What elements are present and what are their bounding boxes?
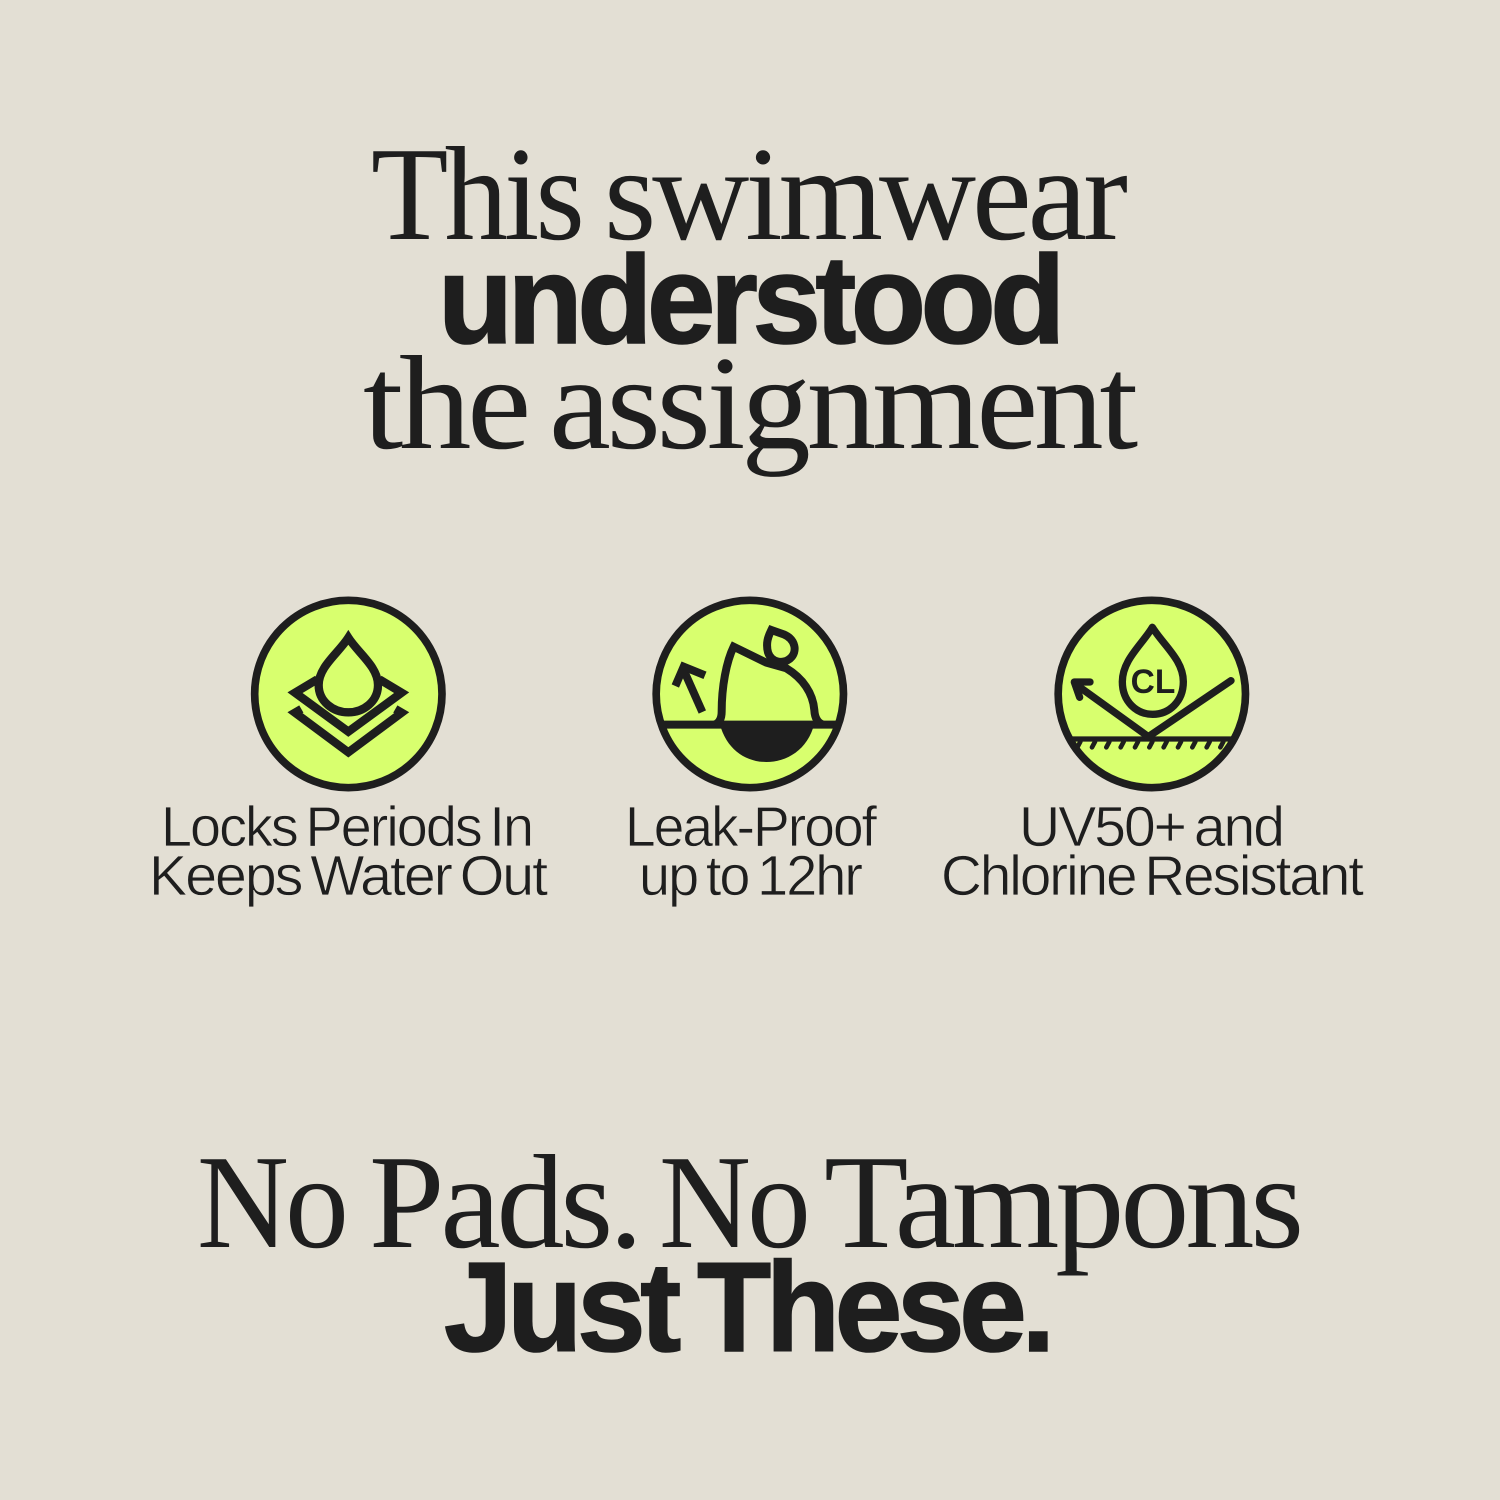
icon: chlorine drop and deflected ray — [1058, 600, 1245, 788]
label: locks periods in: Keeps Water Out — [149, 844, 548, 908]
label: uv50 and chlorine resistant: UV50+ and — [1019, 795, 1283, 859]
label: leak-proof — [625, 795, 877, 908]
closing statement: Just — [444, 1236, 680, 1378]
feature: leak-proof — [625, 600, 877, 908]
title: the — [363, 329, 527, 477]
icon: leak barrier — [656, 600, 843, 788]
title — [363, 120, 1138, 477]
feature: locks periods in — [149, 600, 548, 908]
feature: uv50 and chlorine resistant — [941, 600, 1364, 908]
closing statement: No — [659, 1128, 807, 1276]
closing statement: Pads. — [369, 1128, 639, 1276]
title: understood — [438, 231, 1060, 370]
label: locks periods in — [149, 795, 548, 908]
closing statement: No — [197, 1128, 345, 1276]
label: locks periods in: Locks Periods In — [161, 795, 532, 859]
title: assignment — [549, 329, 1138, 477]
title: swimwear — [604, 120, 1127, 268]
title: This — [371, 120, 581, 268]
icon: water drop on layers — [255, 600, 442, 788]
closing statement: Tampons — [824, 1128, 1300, 1276]
closing statement — [197, 1128, 1300, 1378]
closing statement: These. — [697, 1236, 1050, 1378]
label: leak-proof: Leak-Proof — [625, 795, 877, 859]
label: leak-proof: up to 12hr — [639, 844, 863, 908]
label: uv50 and chlorine resistant: Chlorine Resistant — [941, 844, 1364, 908]
label: uv50 and chlorine resistant — [941, 795, 1364, 908]
icon: chlorine drop and deflected ray: CL — [1131, 663, 1175, 701]
